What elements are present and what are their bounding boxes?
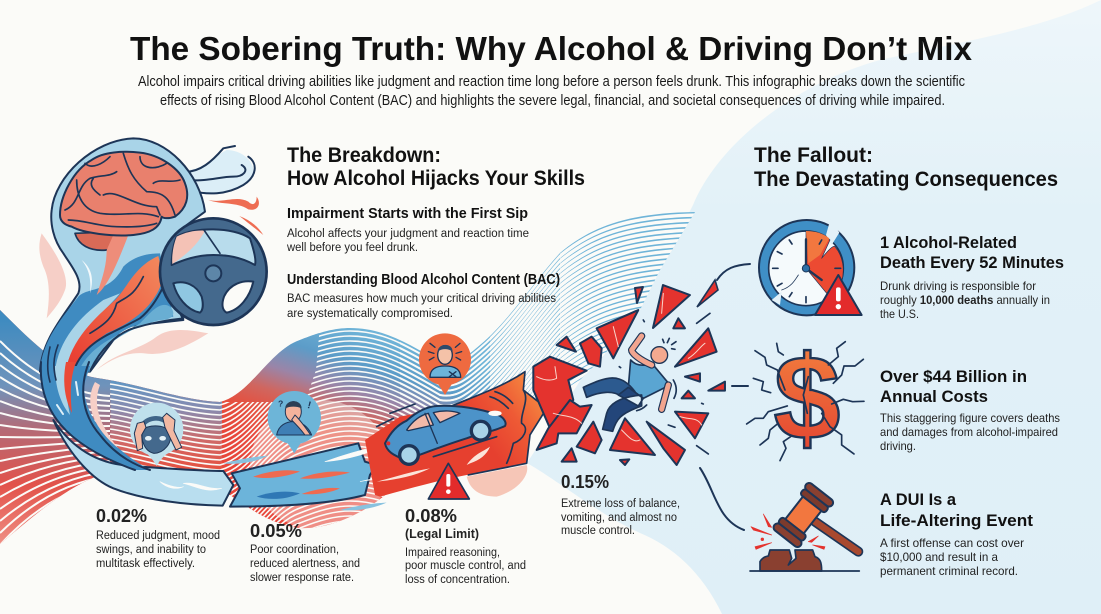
subtitle: effects of rising Blood Alcohol Content (BAC) and highlights the severe legal, financial, and societal consequences of driving while impaired. <box>160 93 945 109</box>
gavel head <box>772 481 835 549</box>
wheel hub <box>205 265 221 281</box>
road: 0.05 segment <box>230 443 377 507</box>
text block: costs: Over $44 Billion in <box>880 367 1027 386</box>
text block: deaths: Death Every 52 Minutes <box>880 253 1064 272</box>
cerebrum <box>60 152 187 235</box>
road: white streaks <box>160 482 222 490</box>
panel: consequences background <box>527 0 1101 614</box>
car wheels <box>400 446 418 464</box>
icon: gavel <box>750 481 859 571</box>
text block: deaths: roughly 10,000 deaths annually in <box>880 293 1050 307</box>
text block: costs: This staggering figure covers deaths <box>880 411 1060 425</box>
brain stem <box>97 235 128 295</box>
label: 0.15%: Extreme loss of balance, <box>561 498 680 510</box>
wheel opening: top <box>172 229 255 265</box>
text block: DUI <box>880 490 1033 578</box>
brain folds <box>65 153 180 227</box>
text block: costs: Annual Costs <box>880 387 988 406</box>
headlight <box>488 411 502 416</box>
label: 0.15%: 0.15% <box>561 472 609 492</box>
label: 0.08%: poor muscle control, and <box>405 560 526 572</box>
ribbon: red stream <box>66 256 163 372</box>
warning triangle <box>815 275 862 315</box>
illustration: shattered shards and falling person <box>533 285 740 465</box>
text block: DUI: A DUI Is a <box>880 490 957 509</box>
label: 0.05%: reduced alertness, and <box>250 558 360 570</box>
label: 0.02%: 0.02% <box>96 506 147 526</box>
text block: DUI: A first offense can cost over <box>880 536 1024 550</box>
wisp: thought cloud <box>187 150 254 194</box>
panel: BAC level labels <box>96 472 680 586</box>
accent highlights <box>82 260 92 293</box>
wisp: pale pink inside the curve <box>90 382 118 448</box>
label: 0.05%: 0.05% <box>250 521 302 541</box>
label: 0.15% <box>561 472 680 537</box>
heading: the breakdown <box>287 144 585 190</box>
heading: the breakdown: How Alcohol Hijacks Your Skills <box>287 167 585 190</box>
cerebellum <box>75 232 118 250</box>
text block: deaths: the U.S. <box>880 307 919 321</box>
wisp lines <box>183 146 255 193</box>
icon: pin confused person (0.05%): ! <box>306 400 312 412</box>
text block: costs <box>880 367 1060 453</box>
wheel opening: lower right <box>222 281 253 313</box>
subtitle <box>138 74 965 109</box>
connector lines <box>700 264 750 530</box>
illustration: brain, head and steering wheel <box>39 138 267 372</box>
label: 0.02%: multitask effectively. <box>96 558 195 570</box>
panel: the breakdown <box>286 144 585 320</box>
shard cracks <box>537 293 705 441</box>
label: 0.02%: swings, and inability to <box>96 544 206 556</box>
chart: flowing BAC wave <box>0 212 695 544</box>
icon: clock with warning <box>759 218 862 315</box>
label: 0.08% <box>405 506 526 586</box>
steering wheel <box>160 218 267 325</box>
icon: warning triangle <box>428 463 469 499</box>
road: 0.08 segment <box>365 372 547 497</box>
label: 0.15%: muscle control. <box>561 525 635 537</box>
text block: deaths: 1 Alcohol-Related <box>880 233 1017 252</box>
car windows <box>407 411 460 431</box>
road ribbon segments <box>53 420 400 510</box>
icon: pin confused person (0.05%): ? <box>278 399 283 409</box>
sound block <box>760 550 822 571</box>
text block: DUI: Life-Altering Event <box>880 511 1033 530</box>
head silhouette <box>40 138 205 372</box>
wisp: pale pink lower <box>97 330 208 370</box>
heading: the breakdown: The Breakdown: <box>287 144 441 167</box>
text block: first sip: Impairment Starts with the First Sip <box>287 206 528 222</box>
text block: first sip: Alcohol affects your judgment and reaction time <box>287 228 529 240</box>
text block: first sip: well before you feel drunk. <box>286 242 418 254</box>
label: 0.15%: vomiting, and almost no <box>561 512 677 524</box>
cracks <box>747 342 864 461</box>
ring breaks <box>772 218 839 305</box>
road edge and cracks <box>450 372 547 475</box>
text block: BAC: are systematically compromised. <box>287 308 453 320</box>
road and car <box>365 333 547 499</box>
ribbon: lower swoosh joining head to road <box>40 345 150 470</box>
impact sparks <box>751 514 825 549</box>
title: The Sobering Truth: Why Alcohol & Driving Don’t Mix <box>130 30 973 67</box>
text block: DUI: $10,000 and result in a <box>880 550 998 564</box>
text block: BAC: Understanding Blood Alcohol Content (BAC) <box>287 272 560 288</box>
gavel handle <box>815 522 858 552</box>
subtitle: Alcohol impairs critical driving abilities like judgment and reaction time long before a person feels drunk. This infographic breaks down the scientific <box>138 74 965 90</box>
wisp: pale pink left <box>39 233 66 318</box>
wisp: red <box>208 197 263 244</box>
icon: pin hands on wheel (0.02%) <box>130 403 183 466</box>
text block: BAC: BAC measures how much your critical driving abilities <box>287 293 556 305</box>
car <box>385 406 506 464</box>
road: 0.02 segment <box>53 420 233 506</box>
heading: the fallout: The Devastating Consequences <box>754 168 1058 191</box>
label: 0.08%: (Legal Limit) <box>405 526 479 541</box>
icon: cracked dollar sign: $ <box>774 331 840 465</box>
text block: first sip <box>286 206 529 254</box>
heading: the fallout <box>754 144 1058 191</box>
small shard near clock connector <box>697 280 718 307</box>
brain <box>60 152 187 295</box>
text block: BAC <box>287 272 560 320</box>
panel: the fallout <box>754 144 1064 578</box>
ribbon: lower pale stripe <box>80 305 173 370</box>
motion marks <box>619 313 740 454</box>
label: 0.05%: slower response rate. <box>250 572 354 584</box>
label: 0.02% <box>96 506 220 570</box>
label: 0.08%: loss of concentration. <box>405 574 510 586</box>
wheel opening: lower left <box>173 282 203 313</box>
ribbon: light inner <box>55 293 120 372</box>
label: 0.05%: Poor coordination, <box>250 544 339 556</box>
heading: the fallout: The Fallout: <box>754 144 873 167</box>
text block: deaths <box>880 233 1064 321</box>
icon: pin dizzy person at 0.08 <box>419 333 471 395</box>
falling person <box>583 313 740 454</box>
road: streaks <box>253 470 350 494</box>
label: 0.08%: 0.08% <box>405 506 457 526</box>
text block: costs: and damages from alcohol-impaired <box>880 425 1058 439</box>
text block: deaths: Drunk driving is responsible for <box>880 279 1036 293</box>
label: 0.05% <box>250 521 360 584</box>
text block: DUI: permanent criminal record. <box>880 564 1018 578</box>
pale fade under road <box>467 465 527 497</box>
icon: pin confused person (0.05%) <box>268 391 321 453</box>
icon: cracked dollar sign <box>747 331 864 465</box>
text block: costs: driving. <box>880 439 916 453</box>
label: 0.08%: Impaired reasoning, <box>405 547 500 559</box>
shards <box>533 285 725 465</box>
label: 0.02%: Reduced judgment, mood <box>96 530 220 542</box>
ribbon: blue body <box>40 253 173 372</box>
